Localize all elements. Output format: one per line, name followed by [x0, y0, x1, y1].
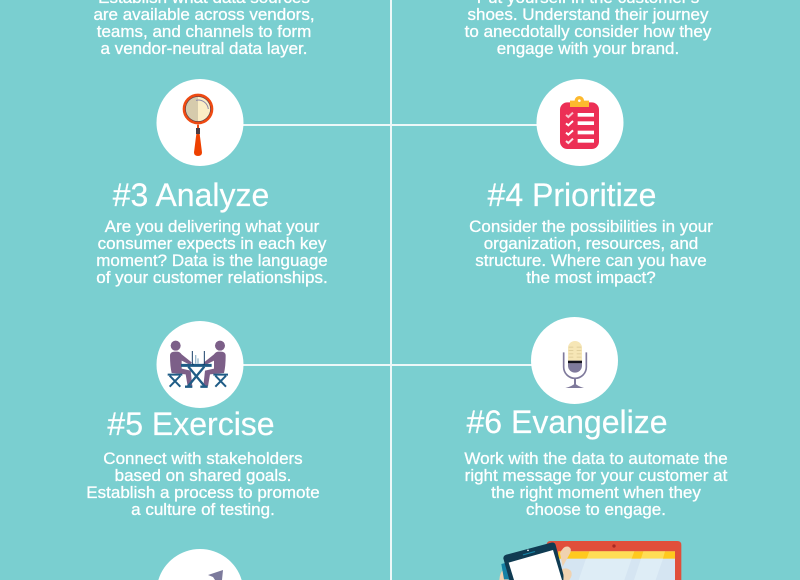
heading: #5 Exercise: #5 Exercise	[107, 406, 275, 442]
text: step 4 description: Consider the possibilities in your	[469, 217, 713, 236]
text: step 3 description: consumer expects in each key	[98, 234, 326, 253]
text: step 2 description: to anecdotally consider how they	[465, 22, 711, 41]
text: step 1 description	[93, 0, 315, 58]
text: step 2 description: engage with your brand.	[497, 39, 679, 58]
text: step 6 description: the right moment when they	[491, 483, 701, 502]
top text band, cropped by the frame	[93, 0, 712, 58]
text: step 6 description: Work with the data to automate the	[464, 449, 728, 468]
text: step 6 description: right message for your customer at	[465, 466, 727, 485]
icon: clipboard checklist	[536, 79, 624, 166]
text: step 6 description	[464, 449, 728, 519]
icon: target with arrow, cropped	[158, 549, 242, 580]
icon: magnifying glass	[156, 79, 244, 166]
icon: microphone	[531, 317, 618, 404]
text: step 3 description: moment? Data is the language	[96, 251, 328, 270]
text: step 4 description: structure. Where can you have	[475, 251, 707, 270]
heading: #4 Prioritize: #4 Prioritize	[488, 177, 656, 213]
text: step 5 description: a culture of testing.	[131, 500, 275, 519]
text: step 5 description: based on shared goals.	[115, 466, 291, 485]
text: step 5 description: Connect with stakeholders	[103, 449, 303, 468]
text: step 3 description: of your customer relationships.	[96, 268, 328, 287]
text: step 3 description: Are you delivering what your	[105, 217, 319, 236]
text: step 1 description: are available across vendors,	[93, 5, 315, 24]
text: step 2 description: shoes. Understand their journey	[468, 5, 708, 24]
text: step 4 description: organization, resources, and	[484, 234, 698, 253]
icon: two people at a table	[156, 321, 244, 408]
text: step 6 description: choose to engage.	[526, 500, 666, 519]
text: step 3 description	[96, 217, 328, 287]
text: step 1 description: teams, and channels to form	[97, 22, 311, 41]
heading: #6 Evangelize: #6 Evangelize	[466, 404, 668, 440]
text: step 5 description: Establish a process to promote	[86, 483, 320, 502]
connector: row 5-6	[240, 364, 535, 366]
text: step 4 description	[469, 217, 713, 287]
centre vertical line	[390, 0, 392, 580]
text: step 5 description	[86, 449, 320, 519]
icon: laptop and phone in hand	[499, 541, 681, 580]
text: step 1 description: a vendor-neutral data layer.	[101, 39, 307, 58]
heading: #3 Analyze: #3 Analyze	[113, 177, 269, 213]
connector: row 3-4	[240, 124, 540, 126]
text: step 2 description	[464, 0, 712, 58]
text: step 4 description: the most impact?	[526, 268, 656, 287]
